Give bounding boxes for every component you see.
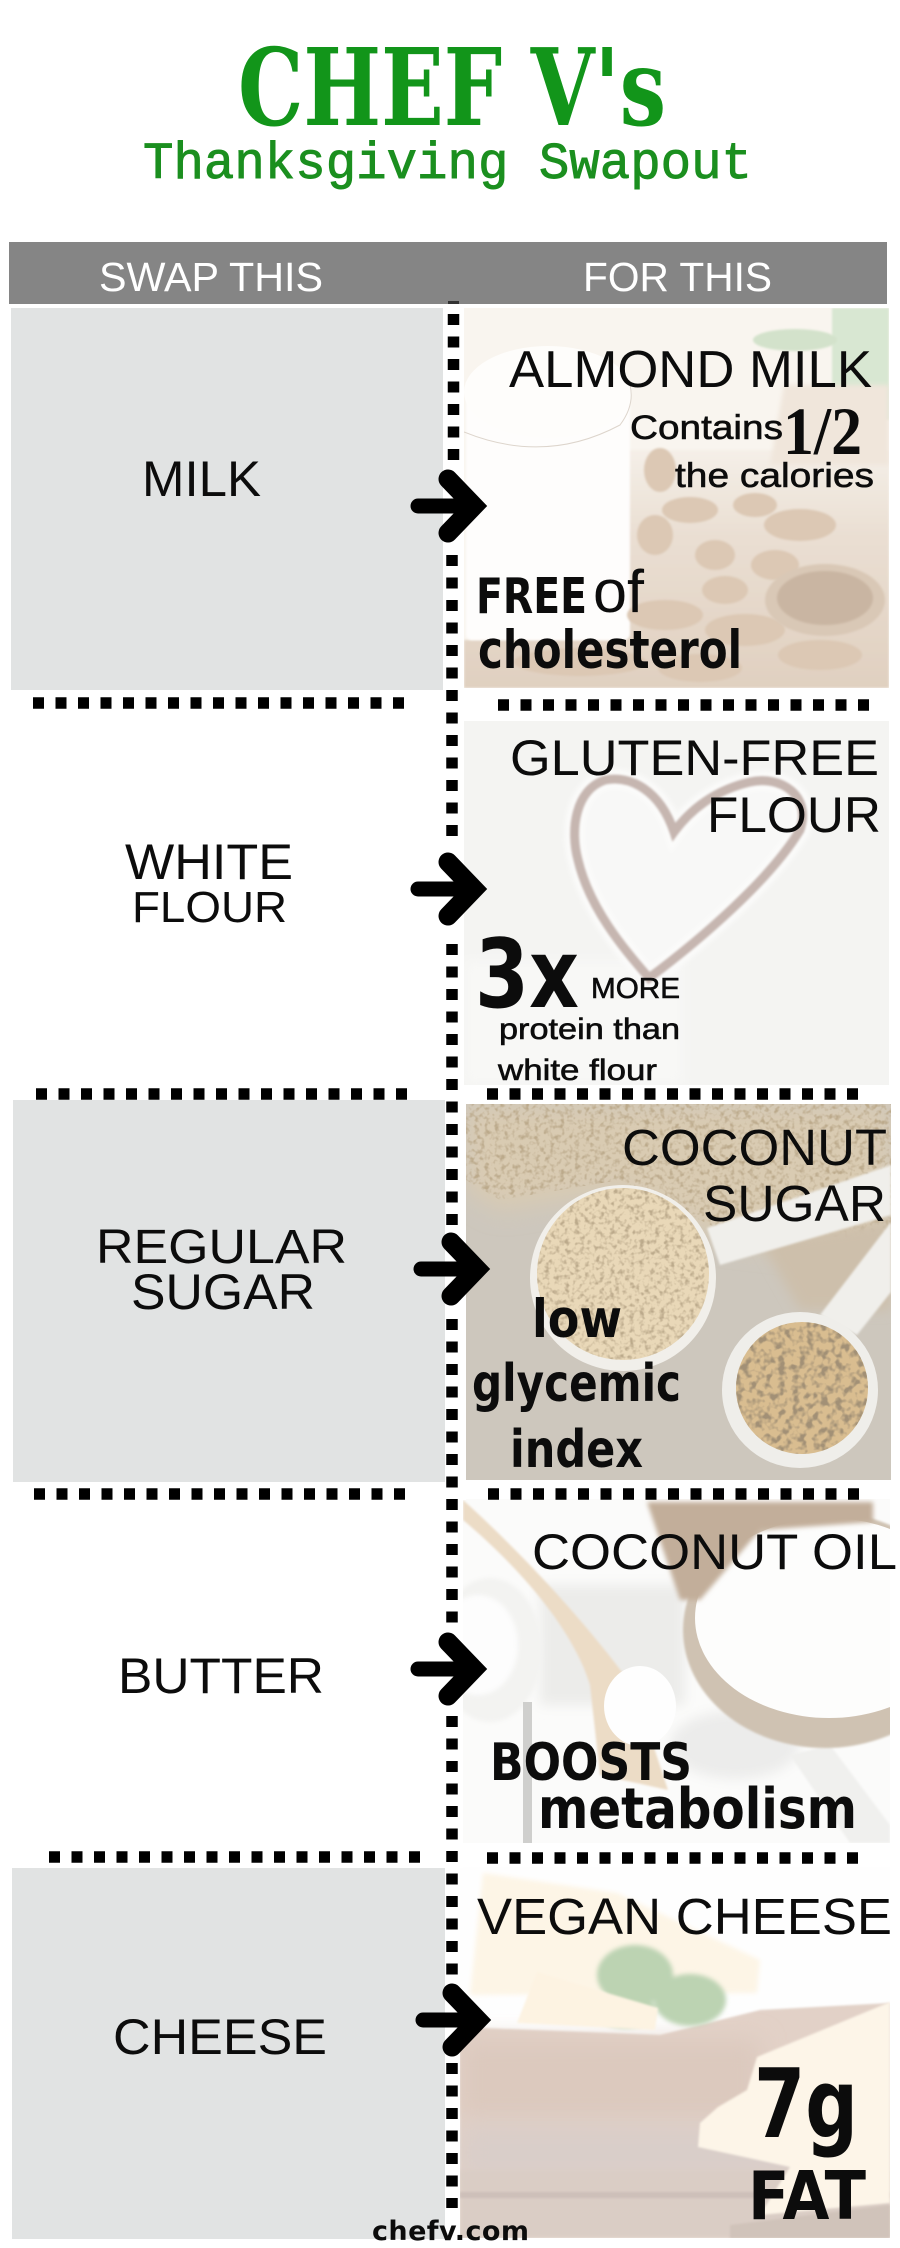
photo: cheese in wooden bowl <box>460 1867 890 2238</box>
title <box>143 26 752 194</box>
stat: more: MORE <box>591 973 680 1005</box>
fact: low: low <box>532 1289 622 1350</box>
fact: metabolism: metabolism <box>538 1777 857 1842</box>
label: white flour <box>125 834 293 932</box>
label: white flour: WHITE <box>125 834 293 890</box>
arrow: butter <box>418 1642 474 1696</box>
fraction: one half: 1/2 <box>783 393 862 469</box>
photo: coconut sugar spoons <box>466 1104 891 1480</box>
subtitle: Thanksgiving Swapout <box>143 135 752 194</box>
stat: 7g: 7g <box>754 2050 858 2160</box>
fact: cholesterol: cholesterol <box>478 620 742 681</box>
column heading: for this: FOR THIS <box>583 254 772 300</box>
arrow: regular sugar <box>421 1242 477 1296</box>
stat: fat: FAT <box>748 2157 866 2235</box>
heading: coconut sugar: COCONUT <box>622 1119 887 1176</box>
panel: milk <box>11 308 443 690</box>
heading: coconut oil: COCONUT OIL <box>532 1524 897 1580</box>
photo: coconut and spoon <box>438 1499 900 1843</box>
footer url: chefv.com <box>372 2216 529 2247</box>
label: milk: MILK <box>142 451 261 507</box>
fact: free: FREE <box>476 568 587 625</box>
fact: index: index <box>510 1420 643 1480</box>
stat: white flour: white flour <box>497 1054 657 1087</box>
panel: gluten-free flour: FLOUR <box>707 787 881 843</box>
panel: regular sugar <box>13 1100 445 1482</box>
panel: coconut sugar <box>466 1104 891 1480</box>
fact: glycemic: glycemic <box>472 1354 681 1414</box>
panel: almond milk <box>464 308 889 688</box>
title: CHEF V's <box>238 26 666 151</box>
fact: the calories: the calories <box>675 457 874 495</box>
arrow: milk <box>418 479 474 533</box>
fact: contains one half: Contains <box>630 409 783 447</box>
panel: gluten-free flour <box>464 721 889 1087</box>
photo: flour heart <box>464 721 889 1085</box>
panel: coconut sugar: SUGAR <box>703 1175 886 1232</box>
label: cheese: CHEESE <box>113 2009 327 2065</box>
panel: cheese <box>12 1868 445 2239</box>
photo: almonds and milk <box>464 308 889 688</box>
heading: gluten-free flour: GLUTEN-FREE <box>510 730 879 786</box>
header bar <box>9 242 887 304</box>
stat: protein than: protein than <box>499 1013 680 1046</box>
panel: regular sugar: SUGAR <box>131 1264 315 1320</box>
label: regular sugar: REGULAR <box>96 1221 347 1274</box>
label: butter: BUTTER <box>118 1648 324 1704</box>
label: white flour: FLOUR <box>132 883 287 932</box>
arrow: cheese <box>423 1993 478 2047</box>
column heading: swap this: SWAP THIS <box>99 254 323 300</box>
heading: almond milk: ALMOND MILK <box>509 341 872 399</box>
panel: coconut oil <box>438 1499 900 1843</box>
fact: of: of <box>593 558 644 625</box>
panel: vegan cheese <box>460 1867 892 2238</box>
fact: boosts: BOOSTS <box>490 1733 692 1793</box>
arrow: white flour <box>418 862 474 916</box>
heading: vegan cheese: VEGAN CHEESE <box>477 1888 892 1945</box>
stat: 3x: 3x <box>475 920 579 1030</box>
